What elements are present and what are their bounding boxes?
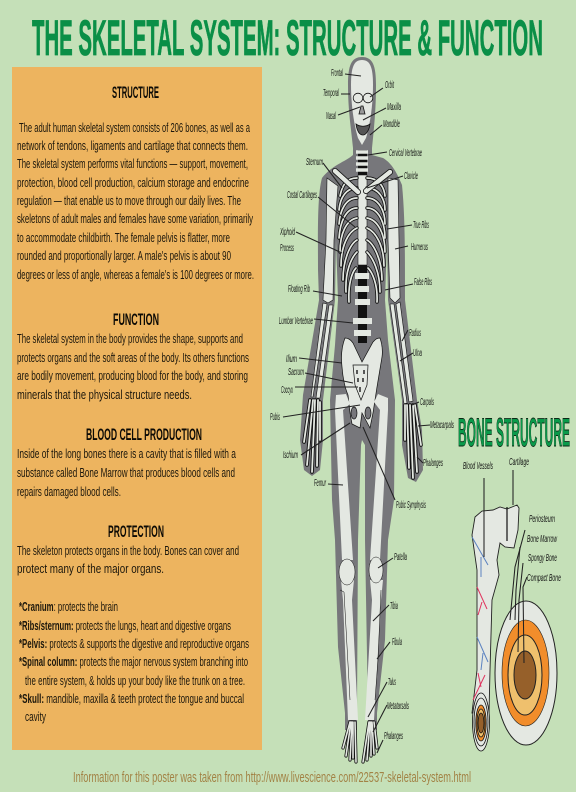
heading: blood cell production: BLOOD CELL PRODUCTION <box>86 425 202 444</box>
label: Pubis: Pubis <box>270 411 280 423</box>
label: Floating Rib: Floating Rib <box>288 283 310 295</box>
bone structure labels: Blood Vessels <box>463 460 493 472</box>
text block: structure: to accommodate childbirth. The female pelvis is flatter, more <box>17 230 230 245</box>
text block: structure: rounded and proportionally larger. A male's pelvis is about 90 <box>17 248 231 263</box>
label: Pubis <box>270 405 360 423</box>
label: Carpals <box>412 396 434 408</box>
label: Ilium <box>286 353 342 365</box>
skeleton labels: True Ribs <box>413 219 429 231</box>
label: Tibia <box>373 600 398 621</box>
skeleton labels: Mandible <box>383 118 400 130</box>
large cross-section <box>495 601 557 745</box>
label: Sacrum: Sacrum <box>288 366 304 378</box>
feet <box>343 722 377 762</box>
label: Nasal <box>326 107 360 122</box>
text block: function: protects organs and the soft areas of the body. Its others functions <box>17 350 249 365</box>
skeleton labels: Orbit <box>385 79 394 91</box>
skeleton labels: False Ribs <box>414 276 432 288</box>
skeleton labels: Carpals <box>420 396 434 408</box>
skeleton labels: Humerus <box>411 241 428 253</box>
label: Compact Bone <box>523 572 561 663</box>
text block: blood cell production <box>17 446 236 499</box>
label: Phalanges (foot) <box>377 730 403 753</box>
arm bones <box>311 178 413 404</box>
bone structure labels <box>463 456 561 663</box>
label: Lumbar Vertebrae: Lumbar Vertebrae <box>279 315 313 327</box>
skeleton labels: Talus <box>388 676 396 688</box>
label: Metatarsals <box>373 700 409 732</box>
skeleton labels: Cervical Vertebrae <box>389 147 422 159</box>
hands <box>304 400 421 478</box>
label: Cervical Vertebrae <box>368 147 422 159</box>
label: Humerus <box>395 241 428 253</box>
text block: structure: network of tendons, ligaments and cartilage that connects them. <box>17 138 248 153</box>
text block: protection: The skeleton protects organs in the body. Bones can cover and <box>17 543 239 558</box>
text block: structure <box>17 120 254 282</box>
label: Radius <box>402 327 421 341</box>
list: protected organs <box>19 599 249 724</box>
label: Bone Marrow <box>515 533 558 620</box>
cartilage line <box>506 507 508 541</box>
label: Xiphoid Process: Xiphoid <box>280 226 295 238</box>
text block: structure: The adult human skeletal system consists of 206 bones, as well as a <box>19 120 250 135</box>
label: Ulna <box>400 347 422 361</box>
label: Sternum <box>306 156 342 188</box>
blood vessels <box>472 537 488 700</box>
label: Coccyx: Coccyx <box>281 384 293 396</box>
text block: blood cell production: Inside of the long bones there is a cavity that is filled with a <box>17 446 236 461</box>
text block: structure: degrees or less of angle, whereas a female's is 100 degrees or more. <box>17 267 254 282</box>
label: Phalanges (hand) <box>417 457 443 469</box>
clavicles <box>335 171 390 192</box>
label: Coccyx <box>281 384 358 396</box>
label: Fibula <box>377 636 402 659</box>
skeleton labels: Maxilla <box>387 101 401 113</box>
list: protected organs: cavity <box>25 709 46 724</box>
label: Temporal: Temporal <box>323 87 339 99</box>
bone shaft <box>472 505 519 713</box>
text block: protection: protect many of the major organs. <box>17 561 164 576</box>
text block: protection <box>17 543 239 576</box>
label: Ischium <box>283 423 350 461</box>
list: protected organs: the entire system, & holds up your body like the trunk on a tree. <box>25 673 245 688</box>
label: Maxilla <box>363 101 401 120</box>
text: Metacarpals <box>430 419 454 431</box>
skeleton labels: Clavicle <box>404 170 418 182</box>
panel: text column <box>12 67 262 750</box>
skeleton labels <box>270 67 454 753</box>
label: Ilium: Ilium <box>286 353 297 365</box>
heading: function: FUNCTION <box>113 310 159 329</box>
label: Frontal: Frontal <box>331 67 343 79</box>
text block: function <box>17 331 249 402</box>
label: Orbit <box>370 79 394 97</box>
text block: function: minerals that the physical structure needs. <box>17 387 192 402</box>
list: protected organs: *Pelvis: protects & supports the digestive and reproductive organs <box>19 636 249 651</box>
skeleton labels: Patella <box>394 551 407 563</box>
skeleton labels: Phalanges <box>384 730 403 742</box>
label: Periosteum <box>510 513 555 620</box>
skeleton labels: Ulna <box>413 347 422 359</box>
label: Femur: Femur <box>314 477 326 489</box>
text block: structure: skeletons of adult males and females have some variation, primarily <box>17 211 253 226</box>
label: Ischium: Ischium <box>283 449 298 461</box>
label: Sacrum <box>288 366 353 383</box>
skeleton labels: Radius <box>409 327 421 339</box>
label: Metacarpals <box>418 419 454 431</box>
label: Costal Cartilages <box>287 189 355 227</box>
label: Costal Cartilages: Costal Cartilages <box>287 189 317 201</box>
skull <box>351 60 373 145</box>
text block: function: The skeletal system in the body provides the shape, supports and <box>17 331 243 346</box>
body silhouette <box>300 57 423 730</box>
list: protected organs: *Ribs/sternum: protects the lungs, heart and digestive organs <box>19 618 231 633</box>
text block: blood cell production: substance called Bone Marrow that produces blood cells and <box>17 465 235 480</box>
leg bones <box>335 394 388 720</box>
label: Nasal: Nasal <box>326 110 336 122</box>
skeleton labels: Tibia <box>390 600 398 612</box>
label: Temporal <box>323 87 350 99</box>
text block: structure: protection, blood cell production, calcium storage and endocrine <box>17 175 249 190</box>
label: Xiphoid Process: Process <box>280 242 294 254</box>
label: Blood Vessels <box>463 460 493 557</box>
list: protected organs: *Skull: mandible, maxilla & teeth protect the tongue and buccal <box>19 691 244 706</box>
heading: protection: PROTECTION <box>108 522 164 541</box>
skeleton labels: Phalanges <box>423 457 443 469</box>
small cross-section <box>472 693 490 751</box>
text block: structure: The skeletal system performs vital functions — support, movement, <box>17 156 248 171</box>
label: Cartilage <box>509 456 529 505</box>
label: Sternum: Sternum <box>306 156 323 168</box>
list: protected organs: *Spinal column: protects the major nervous system branching into <box>19 654 248 669</box>
label: Xiphoid Process <box>280 226 342 254</box>
ribs <box>339 178 385 302</box>
long bone illustration <box>472 505 519 751</box>
skeleton figure <box>300 57 423 762</box>
spine <box>353 150 372 343</box>
label: Talus <box>368 676 396 717</box>
label: Clavicle <box>367 170 418 188</box>
text block: function: are bodily movement, producing blood for the body, and storing <box>17 368 248 383</box>
skeleton labels: Fibula <box>392 636 402 648</box>
list: protected organs: *Cranium: protects the brain <box>19 599 118 614</box>
label: Spongy Bone <box>518 552 557 652</box>
skeleton labels: Pubic Symphysis <box>396 499 426 511</box>
bone structure labels: Cartilage <box>509 456 529 468</box>
label: Mandible <box>370 118 400 135</box>
pelvis <box>341 338 382 428</box>
label: True Ribs <box>387 219 429 231</box>
text block: structure: regulation — that enable us to move through our daily lives. The <box>17 193 241 208</box>
label: Pubic Symphysis <box>363 427 426 511</box>
label: False Ribs <box>385 276 432 290</box>
text block: blood cell production: repairs damaged blood cells. <box>17 484 121 499</box>
label: Patella <box>378 551 407 568</box>
panel: text column: STRUCTURE <box>112 83 159 102</box>
skeleton labels: Metatarsals <box>387 700 409 712</box>
